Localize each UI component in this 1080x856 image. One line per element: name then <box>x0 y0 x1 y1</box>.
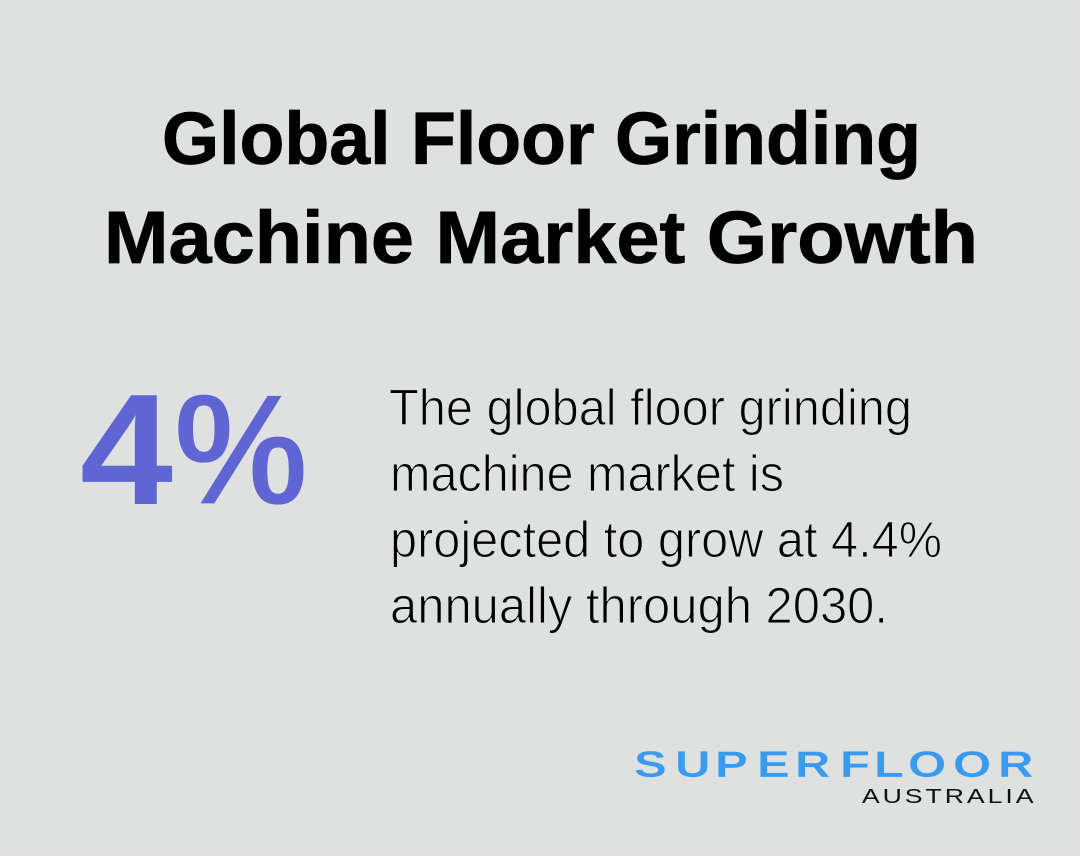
big stat: 4%: % <box>174 362 308 538</box>
big stat: 4% <box>80 362 308 538</box>
big stat: 4%: 4 <box>80 362 173 538</box>
logo wordmark: SUPERFLOOR <box>634 745 1034 785</box>
description text: machine market is <box>390 445 784 502</box>
logo: Superfloor Australia <box>634 745 1034 808</box>
title: Machine Market Growth <box>104 196 978 279</box>
description text: annually through 2030. <box>390 577 888 634</box>
logo subtitle: AUSTRALIA <box>862 785 1034 808</box>
description text: The global floor grinding <box>389 379 912 436</box>
title <box>104 97 978 279</box>
description text <box>389 379 942 634</box>
description text: projected to grow at 4.4% <box>390 511 942 568</box>
title: Global Floor Grinding <box>162 97 921 180</box>
